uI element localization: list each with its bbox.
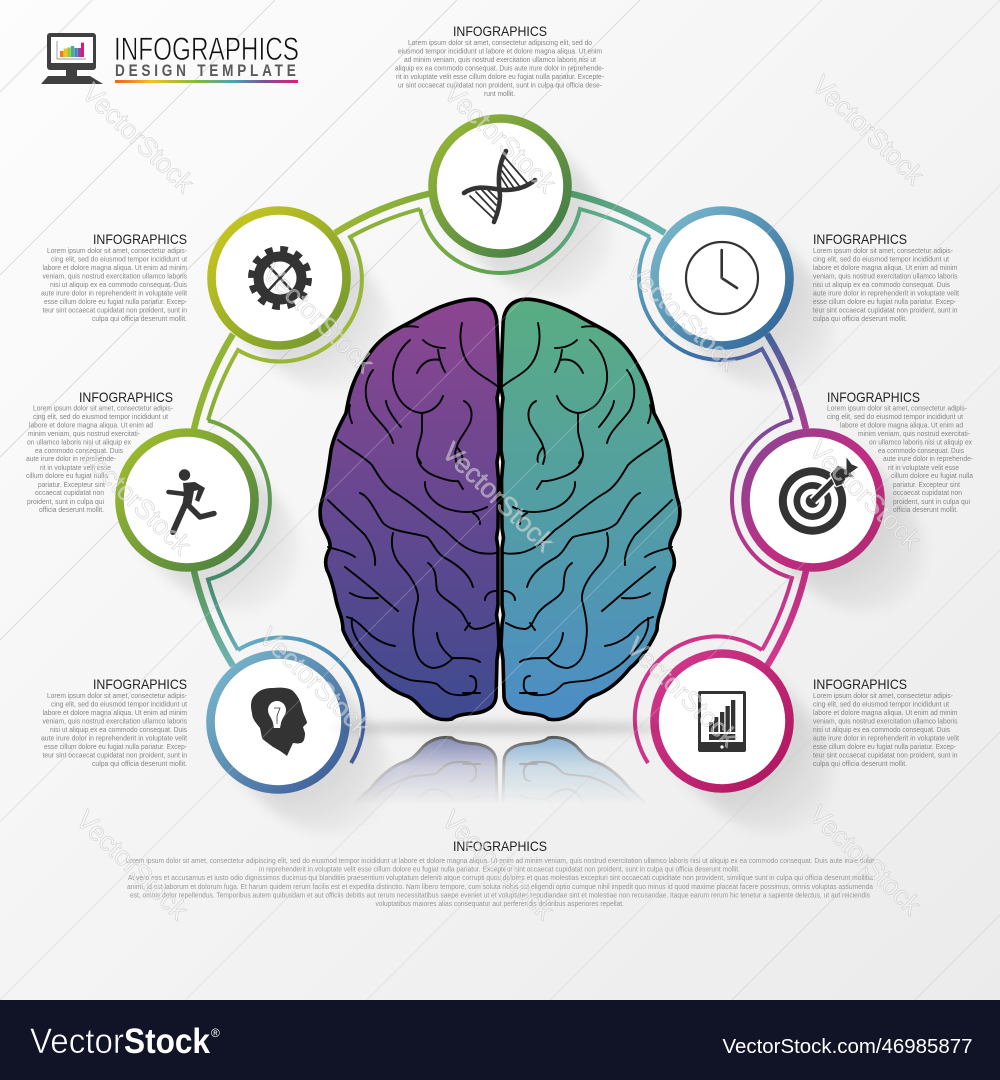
footer bar [0, 1000, 1000, 1080]
icon: clock [686, 242, 758, 314]
node: target [746, 432, 880, 568]
text block: target: minim veniam, quis nostrud exercitati- [858, 429, 971, 438]
text block: head: aute irure dolor in reprehenderit in voluptate velit [41, 734, 187, 742]
text block: runner: Lorem ipsum dolor sit amet, consectetur adipis- [33, 404, 174, 412]
text block: target: on ullamco laboris nisi ut aliquip ex [869, 438, 972, 446]
footer logo: Vector [30, 1022, 124, 1061]
watermarks: VectorStock [253, 622, 377, 743]
node: DNA [432, 118, 568, 254]
text block: target: ea commodo consequat. Duis [878, 446, 964, 455]
text block: bottom: Lorem ipsum dolor sit amet, consectetur adipiscing elit, sed do eiusmod tempor incididunt ut labore et dolore magna aliqua. Ut enim ad minim veniam, quis nostrud exercitation ullamco laboris nisi ut aliquip ex ea commodo consequat. Duis aute irure dolor [126, 858, 875, 865]
text block: bottom [126, 838, 875, 908]
watermarks: VectorStock [73, 440, 197, 561]
watermarks: VectorStock [70, 805, 194, 926]
text block: head: INFOGRAPHICS [93, 676, 187, 692]
watermarks: VectorStock [256, 258, 380, 379]
text block: head: esse cillum dolore eu fugiat nulla pariatur. Excep- [44, 742, 188, 751]
text block: gear: esse cillum dolore eu fugiat nulla pariatur. Excep- [44, 297, 188, 306]
text block: target: pariatur. Excepteur sint [893, 480, 960, 489]
text block: head: culpa qui officia deserunt mollit. [92, 759, 187, 768]
text block: top: eiusmod tempor incididunt ut labore et dolore magna aliqua. Ut enim [398, 46, 602, 56]
text block: top: runt mollit. [484, 89, 515, 98]
watermarks: VectorStock [803, 435, 927, 556]
text block: gear: labore et dolore magna aliqua. Ut enim ad minim [42, 263, 187, 272]
node: head [210, 654, 346, 790]
text block: clock: culpa qui officia deserunt mollit. [813, 314, 907, 323]
text block: target: Lorem ipsum dolor sit amet, consectetur adipis- [827, 404, 968, 412]
text block: clock: nisi ut aliquip ex ea commodo consequat. Duis [813, 280, 950, 289]
text block: bottom: voluptatibus maiores alias consequatur aut perferendis doloribus asperiores repellat. [376, 901, 624, 908]
watermarks: VectorStock [620, 632, 744, 753]
text block: tablet: labore et dolore magna aliqua. Ut enim ad minim [813, 708, 958, 717]
thin line: target ring [732, 420, 792, 650]
connector: target to tablet [767, 571, 806, 666]
text block: target: officia deserunt mollit. [893, 505, 958, 514]
connector: head to runner [194, 571, 233, 666]
text block: runner: cillum dolore eu fugiat nulla [26, 471, 108, 480]
thin line: DNA ring [420, 209, 650, 273]
header logo [41, 31, 299, 84]
connector: runner to gear [194, 334, 233, 429]
watermarks: VectorStock [436, 805, 560, 926]
text block: gear: cing elit, sed do eiusmod tempor incididunt ut [51, 254, 187, 264]
node: clock [654, 210, 790, 346]
text block: bottom: animi, id est laborum et dolorum fuga. Et harum quidem rerum facilis est et expedita distinctio. Nam libero tempore, cum soluta nobis est eligendi optio cumque nihil impedit quo minus id quod maxime placeat facere possimus, omnis voluptas assumenda [127, 884, 873, 891]
text block: head: veniam, quis nostrud exercitation ullamco laboris [42, 716, 187, 726]
text block: tablet: cing elit, sed do eiusmod tempor incididunt ut [813, 700, 949, 708]
text block: tablet: esse cillum dolore eu fugiat nulla pariatur. Excep- [813, 742, 957, 751]
text block: tablet: Lorem ipsum dolor sit amet, consectetur adipis- [813, 691, 954, 700]
text block: clock: veniam, quis nostrud exercitation ullamco laboris [813, 272, 958, 280]
icon: gear [252, 250, 308, 306]
text block: runner: occaecat cupidatat non [35, 488, 104, 497]
text block: runner: aute irure dolor in reprehende- [26, 454, 117, 463]
text block: tablet: nisi ut aliquip ex ea commodo consequat. Duis [813, 725, 950, 734]
text block: target: cillum dolore eu fugiat nulla [891, 471, 973, 480]
text block: tablet: INFOGRAPHICS [813, 676, 907, 692]
text block: head: nisi ut aliquip ex ea commodo consequat. Duis [50, 725, 187, 734]
text block: tablet [813, 676, 959, 768]
text block: runner: rit in voluptate velit esse [40, 463, 111, 472]
text block: gear: teur sint occaecat cupidatat non proident, sunt in [42, 306, 187, 314]
watermarks: VectorStock [438, 78, 562, 199]
icon: running person [168, 469, 214, 532]
node: tablet [654, 654, 790, 788]
text block: bottom: est, omnis dolor repellendus. Temporibus autem quibusdam et aut officiis debitis aut rerum necessitatibus saepe eveniet ut et voluptates repudiandae sint et molestiae non recusandae. Itaque earum rerum hic tenetur a sapiente delectus, ut aut reiciendis [130, 892, 870, 900]
icon: target with arrow [779, 456, 859, 535]
icon: tablet with chart [698, 691, 746, 752]
footer logo [30, 1022, 220, 1061]
text block: gear: INFOGRAPHICS [93, 231, 187, 247]
thin line: tablet ring [635, 636, 762, 763]
text block: top: INFOGRAPHICS [453, 23, 547, 39]
node: runner [120, 432, 254, 568]
text block: head: labore et dolore magna aliqua. Ut enim ad minim [42, 708, 187, 717]
text block: top: ur sint occaecat cupidatat non proident, sunt in culpa qui officia dese- [398, 80, 603, 90]
subtitle: DESIGN TEMPLATE [115, 62, 296, 80]
text block: runner: pariatur. Excepteur sint [38, 480, 105, 489]
right hemisphere [501, 299, 680, 720]
text block: target: occaecat cupidatat non [893, 488, 962, 497]
text block: gear: veniam, quis nostrud exercitation ullamco laboris [42, 272, 187, 280]
text block: top: aliquip ex ea commodo consequat. Duis aute irure dolor in reprehende- [395, 64, 605, 72]
text block: target [827, 389, 974, 514]
text block: tablet: teur sint occaecat cupidatat non proident, sunt in [813, 750, 958, 760]
text block: runner: cing elit, sed do eiusmod tempor incididunt ut [33, 412, 168, 421]
text block: gear: nisi ut aliquip ex ea commodo consequat. Duis [50, 280, 187, 289]
text block: gear [41, 231, 188, 323]
thin line: head ring [238, 638, 363, 763]
watermarks: VectorStock [620, 256, 744, 377]
text block: bottom: in reprehenderit in voluptate velit esse cillum dolore eu fugiat nulla pariatur. Excepteur sint occaecat cupidatat non proident, sunt in culpa qui officia deserunt mollit. [259, 866, 740, 874]
text block: clock: aute irure dolor in reprehenderit in voluptate velit [813, 288, 959, 298]
text block: target: cing elit, sed do eiusmod tempor incididunt ut [827, 412, 963, 421]
brain [320, 299, 680, 720]
footer logo: Stock [124, 1022, 210, 1061]
text block: clock: INFOGRAPHICS [813, 231, 907, 247]
node: gear [212, 210, 346, 346]
brain shadow [335, 723, 665, 733]
text block: runner: ea commodo consequat. Duis [35, 446, 123, 455]
text block: target: proident, sunt in culpa qui [893, 497, 970, 506]
text block: tablet: aute irure dolor in reprehenderit in voluptate velit [813, 734, 959, 742]
text block: runner: minim veniam, quis nostrud exercitati- [28, 429, 141, 438]
text block: target: rit in voluptate velit esse [888, 463, 959, 472]
text block: clock [813, 231, 959, 323]
watermarks [70, 70, 930, 926]
text block: runner: proident, sunt in culpa qui [27, 497, 104, 506]
text block: top: Lorem ipsum dolor sit amet, consectetur adipiscing elit, sed do [408, 38, 592, 47]
text block: gear: Lorem ipsum dolor sit amet, consectetur adipis- [47, 246, 188, 255]
text block: bottom: INFOGRAPHICS [453, 838, 547, 854]
text block: bottom: At vero eos et accusamus et iusto odio dignissimos ducimus qui blanditiis praesentium voluptatum deleniti atque corrupti quos dolores et quas molestias excepturi sint occaecati cupiditate non provident, similique sunt in culpa qui officia deserunt mollitia [128, 875, 873, 882]
text block: clock: Lorem ipsum dolor sit amet, consectetur adipis- [813, 246, 954, 255]
text block: runner: INFOGRAPHICS [79, 389, 173, 405]
text block: top: ad minim veniam, quis nostrud exercitation ullamco laboris nisi ut [404, 55, 596, 64]
watermarks: VectorStock [76, 78, 200, 199]
text block: clock: labore et dolore magna aliqua. Ut enim ad minim [813, 263, 958, 272]
text block: clock: esse cillum dolore eu fugiat nulla pariatur. Excep- [813, 297, 957, 306]
thin line: runner ring [208, 420, 270, 650]
text block: head: Lorem ipsum dolor sit amet, consectetur adipis- [47, 691, 188, 700]
text block: head [41, 676, 188, 768]
connector: DNA to clock [568, 193, 665, 233]
thin line: clock ring [639, 237, 792, 420]
footer url: VectorStock.com/46985877 [722, 1036, 972, 1058]
title: INFOGRAPHICS [114, 31, 299, 67]
long shadows [125, 124, 927, 836]
rainbow rule [115, 80, 298, 83]
connector arcs [194, 193, 806, 763]
brain reflection [358, 736, 643, 800]
text block: target: aute irure dolor in reprehende- [883, 454, 974, 463]
left hemisphere [320, 299, 499, 720]
text block: target: INFOGRAPHICS [827, 389, 920, 405]
text block: runner: officia deserunt mollit. [39, 505, 104, 514]
text block: tablet: culpa qui officia deserunt mollit. [813, 759, 907, 768]
footer logo: ® [211, 1026, 220, 1040]
text block: top [395, 23, 605, 98]
text block: gear: culpa qui officia deserunt mollit. [92, 314, 187, 323]
text block: head: cing elit, sed do eiusmod tempor incididunt ut [51, 700, 187, 708]
watermarks: VectorStock [806, 70, 930, 191]
connector: clock to target [767, 334, 806, 429]
icon: monitor with bar chart [41, 33, 103, 84]
text block: clock: teur sint occaecat cupidatat non proident, sunt in [813, 306, 958, 314]
text block: gear: aute irure dolor in reprehenderit in voluptate velit [41, 288, 187, 298]
watermarks: VectorStock [436, 437, 560, 558]
text block: head: teur sint occaecat cupidatat non proident, sunt in [42, 750, 187, 760]
text block: clock: cing elit, sed do eiusmod tempor incididunt ut [813, 254, 949, 264]
icon: DNA helix [464, 151, 535, 222]
watermarks: VectorStock [803, 800, 927, 921]
icon: head with light bulb [251, 688, 307, 756]
text block: runner: on ullamco laboris nisi ut aliquip ex [27, 438, 131, 446]
connector: gear to DNA [335, 193, 432, 233]
text block: top: rit in voluptate velit esse cillum dolore eu fugiat nulla pariatur. Excepte- [396, 72, 605, 81]
text block: tablet: veniam, quis nostrud exercitation ullamco laboris [813, 716, 958, 726]
thin line: gear ring [208, 209, 420, 420]
text block: target: labore et dolore magna aliqua. Ut enim ad [840, 420, 963, 430]
text block: runner [26, 389, 174, 514]
text block: runner: labore et dolore magna aliqua. Ut enim ad [29, 420, 153, 430]
